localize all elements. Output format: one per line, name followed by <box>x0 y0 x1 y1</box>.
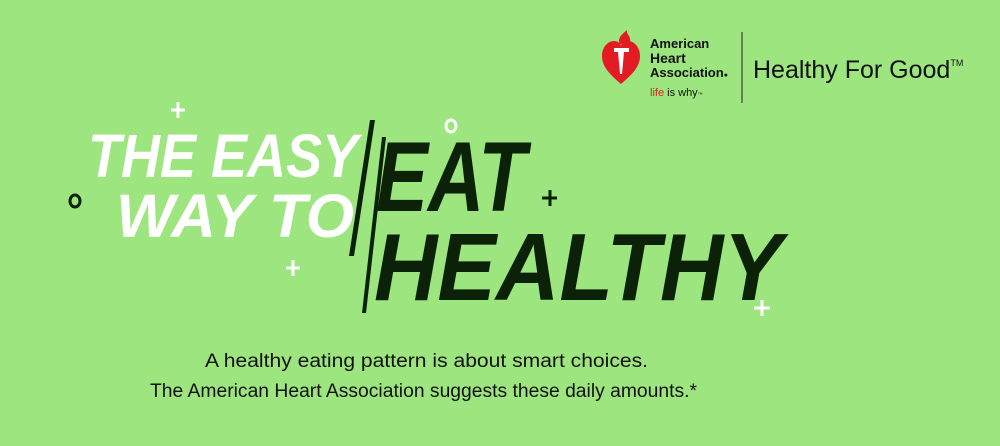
divider line <box>741 32 743 103</box>
slash strokes <box>349 120 386 313</box>
logo: American Heart Association: Association● <box>650 65 728 80</box>
title line: HEALTHY: HEALTHY <box>374 214 789 321</box>
subtitle text: The American Heart Association suggests these daily amounts.* <box>150 381 698 402</box>
subtitle text: A healthy eating pattern is about smart choices. <box>205 351 648 372</box>
subtitle text <box>150 351 698 402</box>
title line: EAT: EAT <box>376 121 532 232</box>
title line: THE EASY: THE EASY <box>88 122 363 190</box>
logo: American Heart Association <box>602 30 728 99</box>
logo text: American <box>650 36 709 51</box>
logo: American Heart Association: Heart <box>650 50 686 66</box>
logo: American Heart Association: life is why™ <box>650 87 703 99</box>
brand: Healthy For Good: Healthy For Good <box>753 56 950 84</box>
icon: heart with torch <box>602 30 640 84</box>
decorations: plus signs and circles <box>70 102 770 316</box>
title <box>88 120 789 321</box>
brand: Healthy For Good: TM <box>950 58 963 68</box>
title line: WAY TO: WAY TO <box>116 182 354 250</box>
